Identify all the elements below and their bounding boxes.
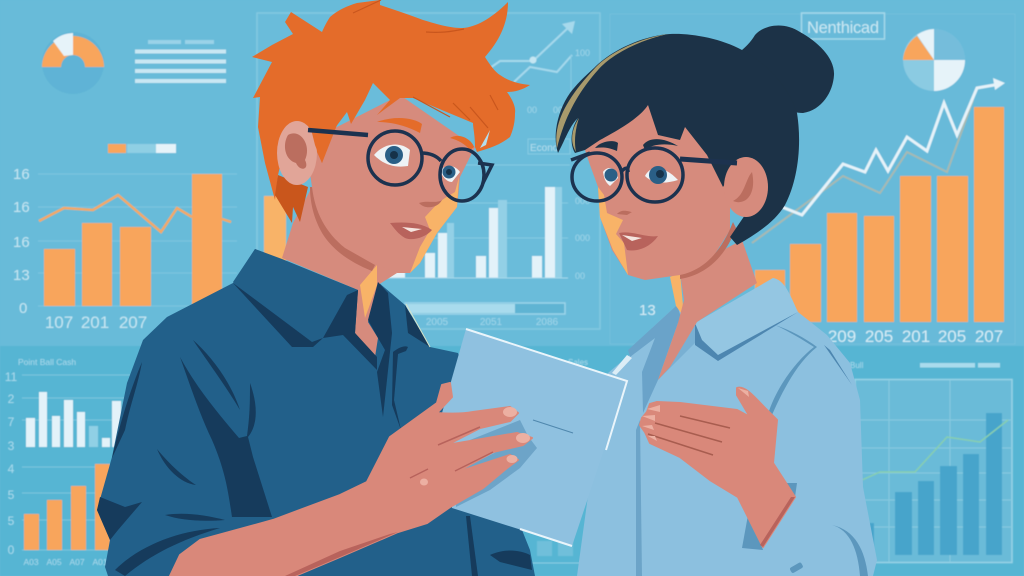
bar and line chart: right: 7 [807, 327, 817, 346]
man: face [308, 95, 475, 273]
center chart: 00 [527, 105, 537, 115]
label box: Nenthicad: Nenthicad [807, 19, 879, 37]
woman: eyes [603, 166, 678, 186]
lower left charts: 3 [8, 439, 15, 453]
woman: face [585, 100, 730, 280]
man: neck [282, 187, 397, 357]
lower left charts: A03 [23, 557, 39, 567]
center chart: 00 [575, 271, 585, 281]
man: neck highlight [360, 265, 377, 318]
bar and line chart: left: 201 [81, 313, 109, 332]
lower left charts [5, 357, 140, 567]
woman: mouth [619, 232, 658, 250]
woman: ear [724, 157, 768, 217]
man: glasses [308, 130, 492, 201]
bar and line chart: right [752, 78, 1005, 346]
lower left charts: A07 [69, 557, 85, 567]
lower left charts: A05 [46, 557, 62, 567]
lower left charts: Point Ball Cash [18, 357, 76, 367]
lower left charts: 5 [8, 488, 15, 502]
bar and line chart: right: 209 [828, 327, 856, 346]
bar and line chart: right: 201 [902, 327, 930, 346]
man figure [97, 0, 627, 576]
lower right chart: Bull [850, 361, 864, 370]
lower center bars [530, 358, 588, 563]
document held between the two people [440, 329, 627, 546]
center chart: Econo [530, 143, 559, 154]
woman: hair [556, 34, 799, 245]
man: nose [419, 200, 442, 207]
woman: glasses [571, 148, 737, 202]
woman: hair highlight [556, 34, 668, 152]
center chart: 000 [575, 233, 590, 243]
lower left charts: A01 [92, 557, 108, 567]
man: hair slit [480, 130, 490, 148]
woman: sleeve cuff [742, 483, 797, 550]
man: collar [233, 249, 430, 417]
man: hair strands [353, 0, 498, 128]
text lines: top left [135, 40, 226, 83]
lower left charts: 7 [8, 415, 15, 429]
bar and line chart: left: 16 [13, 166, 30, 183]
lower left charts: 5 [8, 514, 15, 528]
lower left charts: 4 [8, 462, 15, 476]
bar and line chart: left: 16 [13, 199, 30, 216]
pie chart: top right [903, 29, 965, 91]
woman: hand [640, 388, 795, 547]
center chart: 2005 [426, 317, 449, 328]
center chart: 100 [575, 48, 590, 58]
center chart: 2051 [480, 317, 503, 328]
lower right chart [850, 361, 1012, 562]
man: shirt [97, 249, 535, 576]
center chart [264, 21, 656, 328]
woman: jaw shadow [680, 222, 736, 279]
bar and line chart: right: 207 [975, 327, 1003, 346]
label box: Nenthicad [802, 13, 884, 39]
bar and line chart: left: 13 [13, 267, 30, 284]
man: ear [277, 121, 317, 185]
pie chart: top left [42, 32, 104, 94]
center chart: 2086 [536, 317, 559, 328]
lower left charts: 0 [8, 543, 15, 557]
woman: hair bun [742, 26, 834, 113]
woman: eyebrows [595, 139, 678, 151]
center chart: 000 [575, 196, 590, 206]
man: eyebrows [377, 118, 474, 150]
man: arm and hand [170, 383, 532, 576]
bar and line chart: left: 107 [45, 313, 73, 332]
man: hair tip beside ear [310, 125, 337, 163]
woman figure [556, 26, 877, 576]
woman: nose [617, 211, 632, 215]
woman: face highlight [598, 187, 628, 275]
chart legend [108, 144, 176, 153]
lower center bars: Sales [568, 358, 588, 367]
center chart: 13 [639, 302, 656, 319]
woman: shirt [577, 278, 877, 576]
man: jaw shadow [310, 187, 375, 271]
bar and line chart: right: 205 [865, 327, 893, 346]
man: shirt folds [97, 340, 532, 576]
bar and line chart: left: 16 [13, 234, 30, 251]
bar and line chart: left: 0 [19, 300, 27, 317]
woman: neck highlight [670, 272, 684, 317]
bar and line chart: right: 205 [938, 327, 966, 346]
center chart: 00 [553, 105, 563, 115]
man: face highlight [410, 177, 459, 273]
man: sideburn [275, 175, 308, 223]
lower left charts: 2 [8, 392, 15, 406]
lower left charts: 11 [5, 370, 18, 384]
man: mouth [390, 223, 432, 239]
man: eyes [374, 145, 460, 182]
woman: neck [658, 240, 757, 380]
man: hair [252, 0, 530, 200]
bar and line chart: left [13, 166, 237, 332]
bar and line chart: left: 207 [119, 313, 147, 332]
